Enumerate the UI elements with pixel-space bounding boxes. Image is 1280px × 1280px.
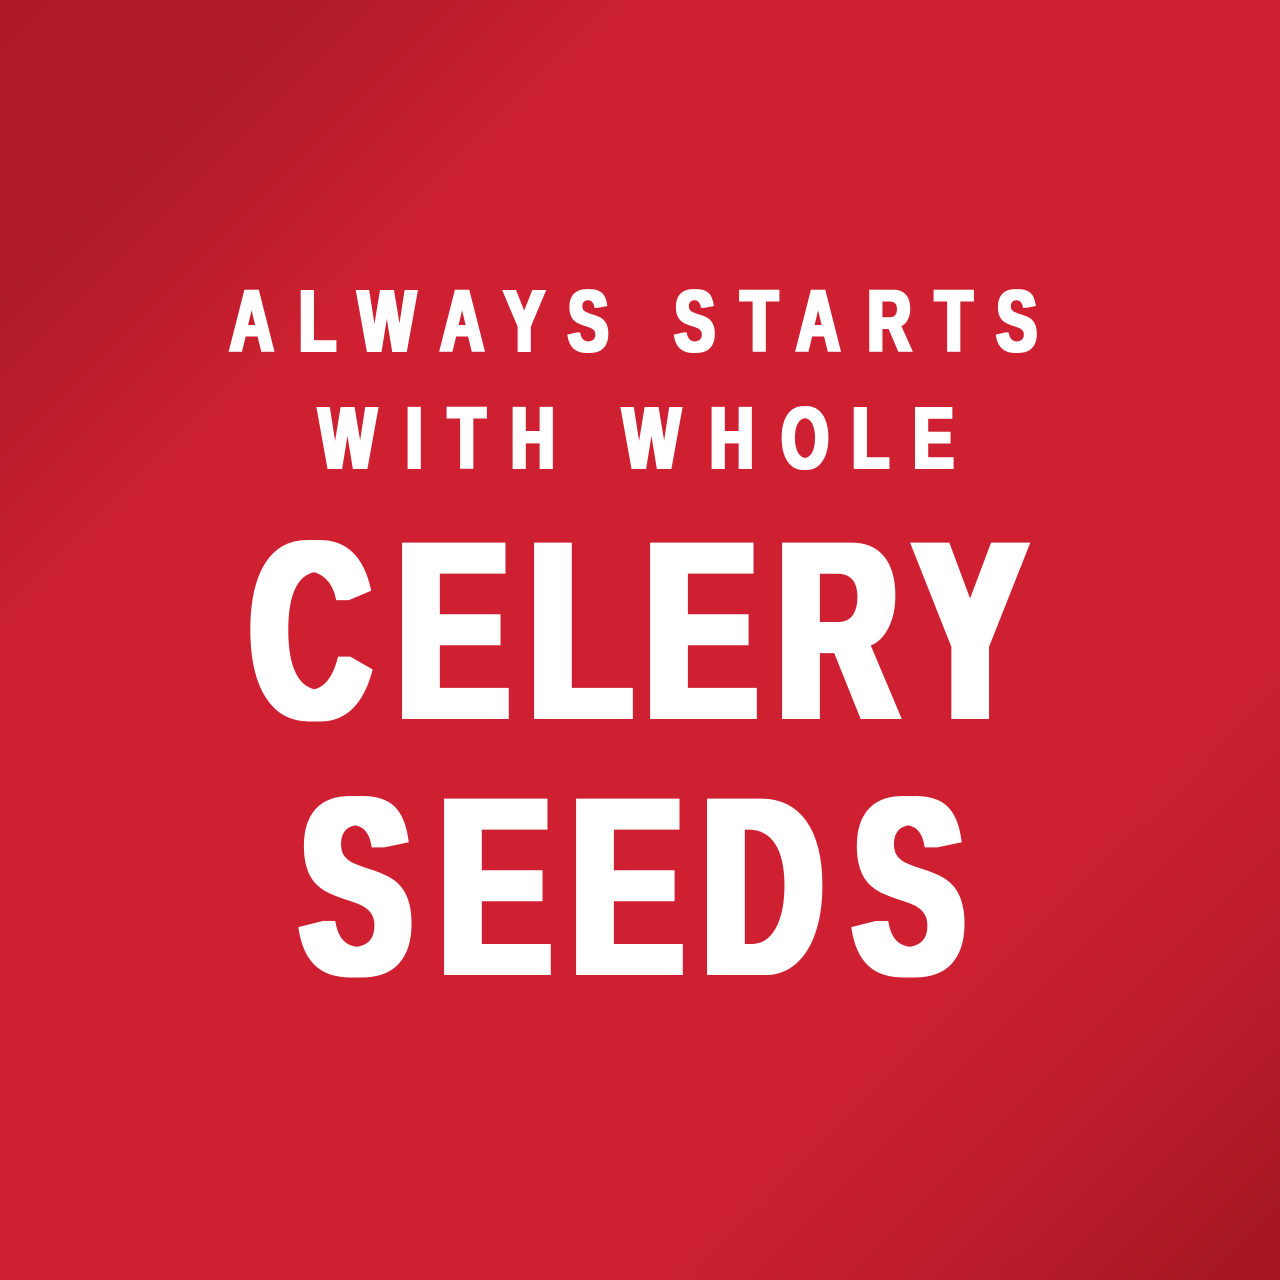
heading: always starts: ALWAYS STARTS bbox=[230, 272, 1037, 370]
heading: seeds: SEEDS bbox=[301, 746, 964, 1028]
heading: celery: CELERY bbox=[251, 490, 1025, 772]
heading: with whole: WITH WHOLE bbox=[319, 389, 954, 487]
